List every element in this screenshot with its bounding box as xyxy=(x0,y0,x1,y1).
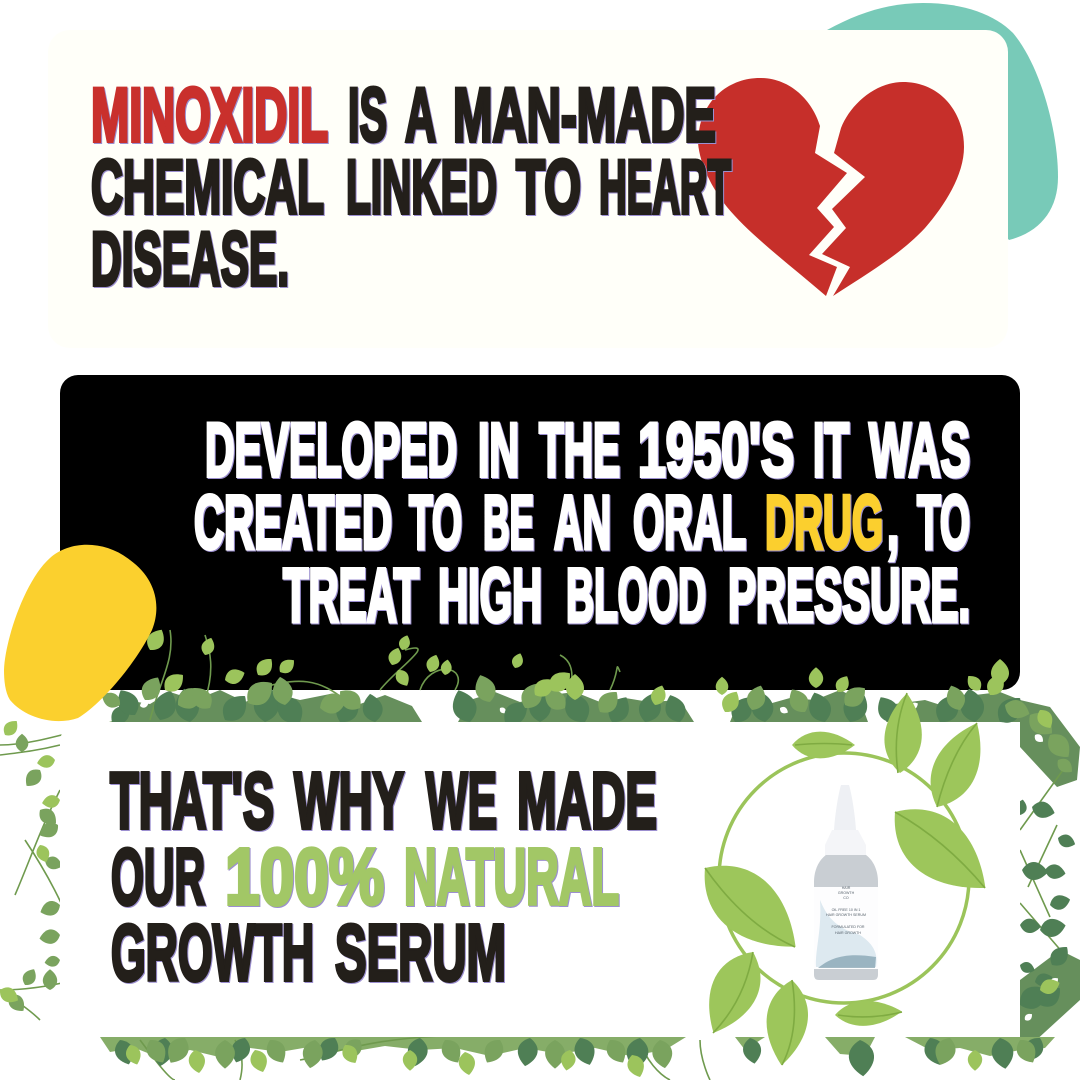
heading: drug history statement: THE xyxy=(539,408,620,493)
heading: natural growth serum: OUR xyxy=(111,832,205,921)
heading: natural growth serum: 100% xyxy=(225,832,384,921)
heading: drug history statement: AN xyxy=(554,480,611,566)
panel: bottom white card xyxy=(60,722,1020,1037)
panel: black card xyxy=(60,375,1020,690)
label text: HAIR GROWTH SERUM xyxy=(826,913,866,917)
leaf wreath xyxy=(686,692,1004,1068)
heading: minoxidil statement: MAN-MADE xyxy=(453,73,716,158)
teal blob behind top panel xyxy=(827,3,1058,240)
heading: natural growth serum: WHY xyxy=(294,756,404,845)
label text: CO xyxy=(843,896,849,900)
heading: minoxidil statement: LINKED xyxy=(346,145,497,230)
heading: minoxidil statement xyxy=(91,73,731,302)
heading: drug history statement: , xyxy=(887,480,899,566)
heading: drug history statement: BLOOD xyxy=(566,554,706,638)
heading: natural growth serum: WE xyxy=(426,756,497,845)
heading: natural growth serum: GROWTH xyxy=(111,908,314,997)
heading: minoxidil statement: IS xyxy=(348,73,387,158)
heading: minoxidil statement: A xyxy=(405,73,436,158)
heading: drug history statement: DRUG xyxy=(765,480,883,566)
bottle nozzle and cap xyxy=(834,785,856,830)
label text xyxy=(826,886,866,935)
label splash xyxy=(816,900,877,967)
label text: GROWTH xyxy=(838,891,855,895)
product: serum bottle xyxy=(814,785,878,980)
label text: FORMULATED FOR xyxy=(831,925,865,929)
label text: OIL FREE 10 IN 1 xyxy=(832,908,860,912)
heading: drug history statement: WAS xyxy=(869,408,970,493)
vines surrounding bottom panel xyxy=(0,626,1080,1080)
heading: natural growth serum: THAT'S xyxy=(110,756,274,845)
heading: drug history statement: TO xyxy=(409,480,462,566)
heading: natural growth serum: NATURAL xyxy=(404,832,619,921)
heading: drug history statement: IN xyxy=(478,408,519,493)
heading: drug history statement: HIGH xyxy=(438,554,542,638)
heading: minoxidil statement: TO xyxy=(516,145,581,230)
heading: drug history statement: ORAL xyxy=(633,480,746,566)
heading: minoxidil statement: HEART xyxy=(599,145,731,230)
heading: drug history statement: IT xyxy=(813,408,849,493)
heading: drug history statement xyxy=(194,408,970,638)
heading: drug history statement: CREATED xyxy=(194,480,392,566)
icon: broken heart xyxy=(698,78,964,296)
label text: HAIR GROWTH xyxy=(835,931,861,935)
bottle label xyxy=(814,887,878,969)
heading: natural growth serum: SERUM xyxy=(335,908,506,997)
heading: minoxidil statement: MINOXIDIL xyxy=(91,73,328,158)
label text: HAIR xyxy=(842,886,851,890)
heading: drug history statement: BE xyxy=(483,480,534,566)
heading: drug history statement: TO xyxy=(917,480,970,566)
heading: drug history statement: DEVELOPED xyxy=(205,408,457,493)
panel: top cream card xyxy=(48,30,1008,348)
heading: natural growth serum xyxy=(110,756,657,997)
bottle body xyxy=(814,855,878,980)
heading: drug history statement: TREAT xyxy=(283,554,419,638)
heading: minoxidil statement: CHEMICAL xyxy=(91,145,324,230)
heading: minoxidil statement: DISEASE. xyxy=(91,217,289,302)
heading: natural growth serum: MADE xyxy=(517,756,657,845)
heading: drug history statement: 1950'S xyxy=(638,408,794,493)
yellow blob xyxy=(4,545,156,721)
